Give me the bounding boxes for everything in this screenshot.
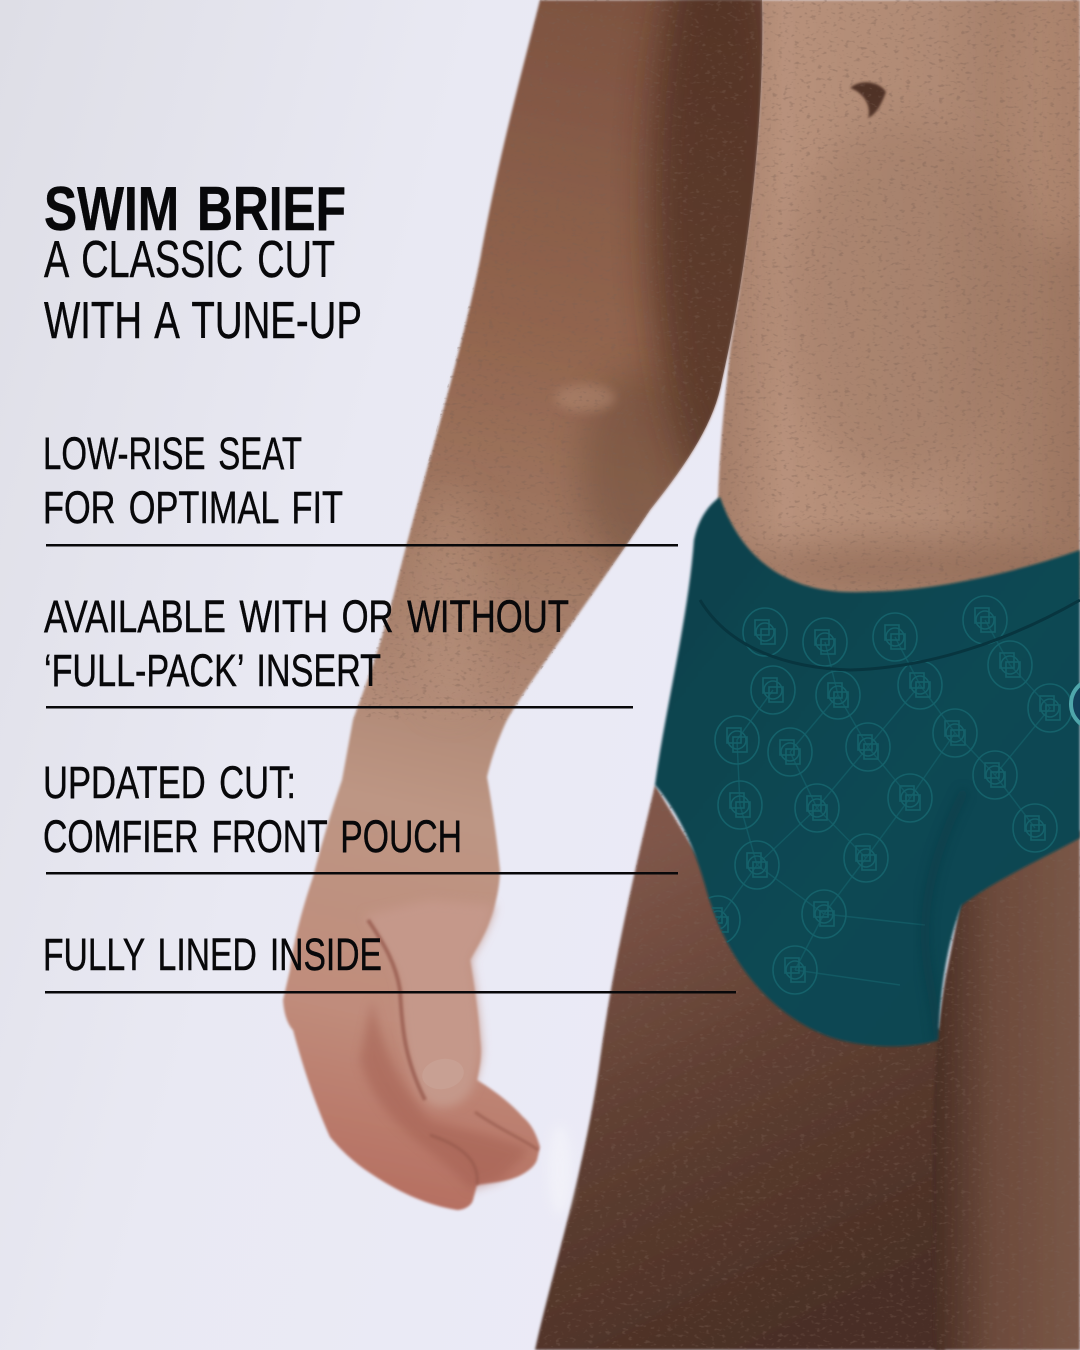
photo: model bbox=[282, 0, 1080, 1350]
feature: fully lined: FULLY LINED INSIDE bbox=[43, 929, 382, 980]
feature: low-rise seat bbox=[43, 428, 678, 546]
crotch seam shadow bbox=[920, 924, 942, 1040]
subtitle: A CLASSIC CUT bbox=[44, 231, 335, 289]
title: SWIM BRIEF bbox=[44, 175, 346, 244]
feature: updated cut bbox=[43, 757, 678, 874]
feature: updated cut: COMFIER FRONT POUCH bbox=[43, 811, 462, 862]
arm shading bbox=[410, 0, 790, 710]
thumbnail bbox=[420, 1056, 466, 1092]
pattern links bbox=[718, 620, 1050, 985]
feature: low-rise seat: LOW-RISE SEAT bbox=[43, 428, 302, 479]
thumb crease bbox=[368, 920, 425, 1100]
arm and hand bbox=[283, 0, 790, 1210]
logo pattern bbox=[696, 596, 1072, 994]
feature: full-pack insert: ‘FULL-PACK’ INSERT bbox=[44, 645, 381, 696]
finger gaps bbox=[430, 1112, 538, 1185]
subtitle: WITH A TUNE-UP bbox=[44, 292, 362, 350]
torso bbox=[718, 0, 1080, 600]
brief bbox=[655, 497, 1080, 1046]
skin hair texture bbox=[354, 0, 1080, 1350]
badge bbox=[1071, 679, 1080, 729]
palm shadow bbox=[360, 1000, 530, 1190]
feature: full-pack insert: AVAILABLE WITH OR WITHOUT bbox=[44, 591, 569, 642]
leg hair fringe bbox=[548, 1125, 572, 1215]
subtitle bbox=[44, 231, 362, 350]
feature: low-rise seat: FOR OPTIMAL FIT bbox=[43, 482, 343, 533]
feature: full-pack insert bbox=[44, 591, 633, 708]
feature: updated cut: UPDATED CUT: bbox=[43, 757, 296, 808]
left leg bbox=[535, 785, 945, 1350]
right leg bbox=[932, 830, 1080, 1350]
waistband seam bbox=[700, 600, 1080, 670]
thumb bbox=[365, 900, 494, 1107]
